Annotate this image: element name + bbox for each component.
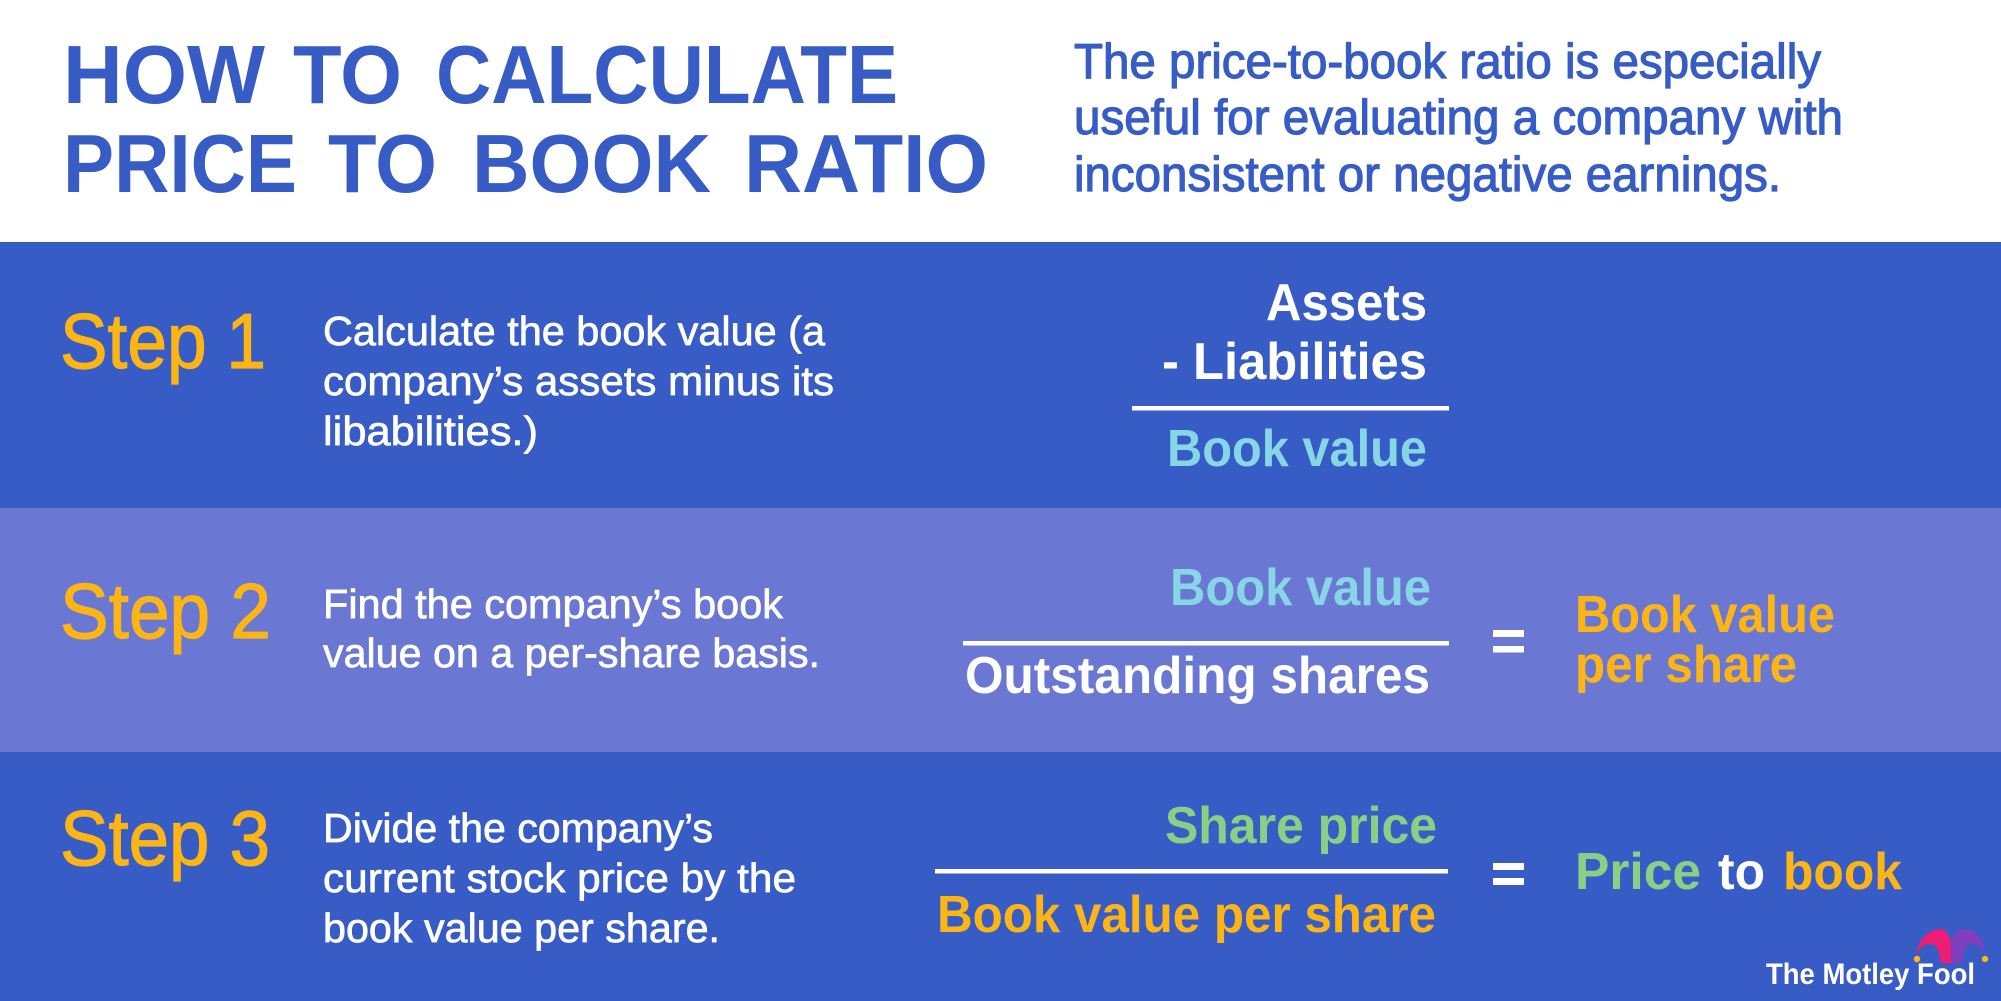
title: PRICE bbox=[63, 117, 297, 210]
step 1 heading: Step 1 bbox=[60, 297, 266, 385]
step 1 formula: Assets bbox=[1266, 274, 1427, 332]
step 3 formula: Share price bbox=[1165, 797, 1437, 855]
step 2 result: per share bbox=[1575, 636, 1797, 694]
title: TO bbox=[293, 28, 402, 121]
panel: step 3 bbox=[0, 752, 2001, 1001]
title: HOW bbox=[63, 28, 266, 121]
title bbox=[63, 28, 988, 210]
title: RATIO bbox=[744, 117, 988, 210]
step 1 formula: - Liabilities bbox=[1162, 333, 1427, 391]
step 2 result: Book value bbox=[1575, 586, 1835, 644]
step 1 description: Calculate the book value (a bbox=[323, 308, 825, 354]
step 3 description: current stock price by the bbox=[323, 855, 796, 901]
step 1 description bbox=[323, 308, 834, 454]
step 1 description: company’s assets minus its bbox=[323, 358, 834, 404]
step 2 description: value on a per-share basis. bbox=[323, 630, 820, 676]
step 2 description bbox=[323, 581, 820, 676]
panel: step 1 bbox=[0, 242, 2001, 508]
subtitle text: inconsistent or negative earnings. bbox=[1074, 148, 1781, 202]
step 2 formula: Book value bbox=[1170, 559, 1431, 617]
logo: The Motley Fool bbox=[1766, 929, 1988, 991]
step 3 heading: Step 3 bbox=[60, 794, 270, 882]
step 3 description: Divide the company’s bbox=[323, 805, 713, 851]
step 3 result: book bbox=[1783, 843, 1902, 901]
step 3 result: to bbox=[1718, 843, 1765, 901]
subtitle text bbox=[1074, 35, 1843, 202]
step 2 heading: Step 2 bbox=[60, 567, 271, 655]
step 1 formula bbox=[1132, 274, 1449, 478]
step 3 result bbox=[1575, 843, 1902, 901]
step 1 description: libabilities.) bbox=[323, 408, 538, 454]
step 2 equals sign bbox=[1493, 630, 1524, 652]
title: BOOK bbox=[472, 117, 711, 210]
step 2 description: Find the company’s book bbox=[323, 581, 783, 627]
step 2 result bbox=[1575, 586, 1835, 694]
step 1 formula: Book value bbox=[1167, 420, 1427, 478]
step 3 equals sign bbox=[1493, 863, 1524, 885]
step 3 result: Price bbox=[1575, 843, 1701, 901]
subtitle text: useful for evaluating a company with bbox=[1074, 91, 1843, 145]
title: CALCULATE bbox=[436, 28, 898, 121]
step 3 formula: Book value per share bbox=[937, 886, 1436, 944]
step 3 description: book value per share. bbox=[323, 905, 720, 951]
icon: jester hat bbox=[1914, 929, 1988, 964]
step 3 description bbox=[323, 805, 796, 951]
step 3 formula bbox=[935, 797, 1448, 944]
step 2 formula bbox=[963, 559, 1449, 705]
subtitle text: The price-to-book ratio is especially bbox=[1074, 35, 1821, 89]
logo wordmark: The Motley Fool bbox=[1766, 958, 1975, 991]
panel: step 2 bbox=[0, 508, 2001, 752]
step 2 formula: Outstanding shares bbox=[965, 647, 1430, 705]
title: TO bbox=[328, 117, 437, 210]
panel: header bbox=[0, 0, 2001, 242]
